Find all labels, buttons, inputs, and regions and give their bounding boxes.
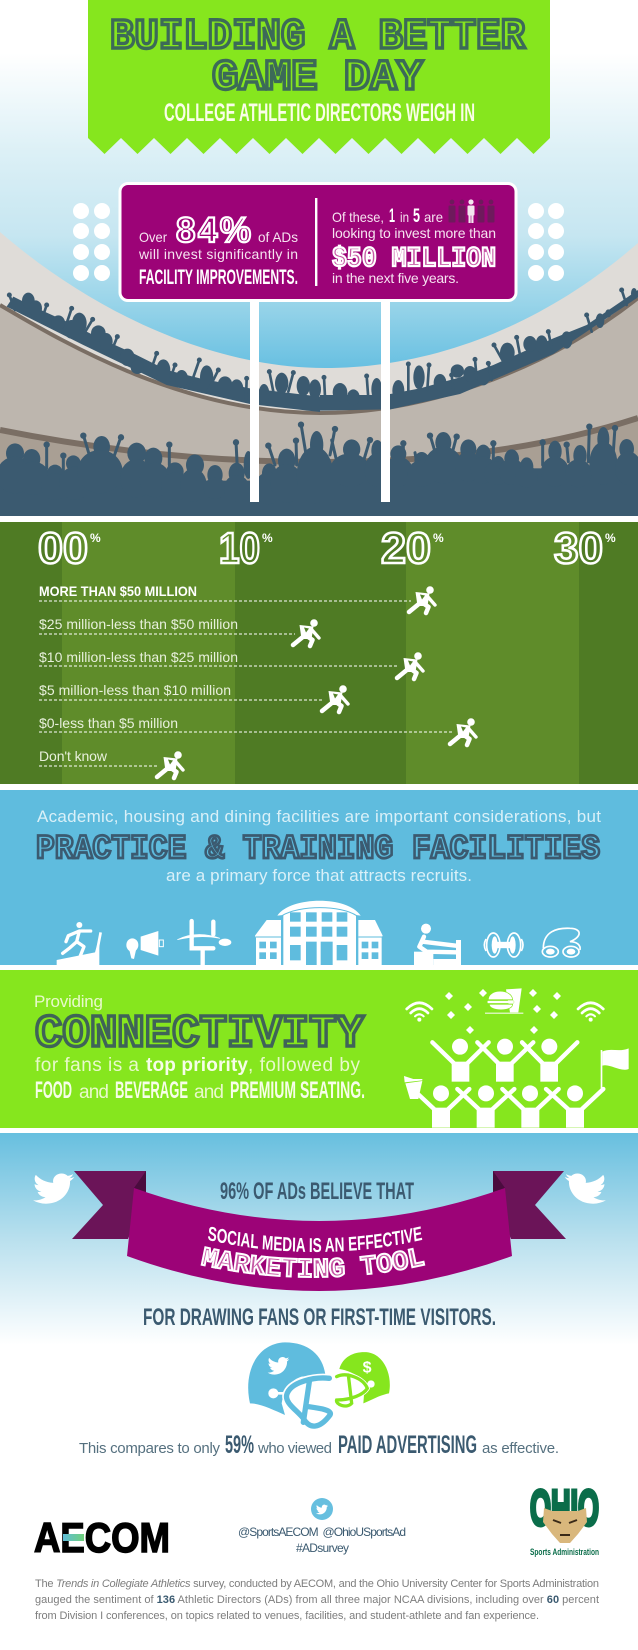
crowd: lower left: [0, 424, 333, 516]
ribbon folds: [134, 1171, 146, 1192]
stadium lights: right: [528, 203, 564, 281]
logo: AECOM: AECOM: [34, 1514, 170, 1561]
text: food, beverage, seating: FOOD: [35, 1077, 72, 1104]
row: $5 million-less than $10 million: $5 million-less than $10 million: [39, 682, 231, 698]
stat: 1 in 5: in: [400, 209, 409, 225]
icon: wifi right: [578, 1003, 603, 1022]
row: more than $50 million: MORE THAN $50 MILLION: [39, 583, 197, 599]
text: food, beverage, seating: BEVERAGE: [115, 1077, 188, 1104]
panel: title banner: [88, 0, 550, 154]
icon: upper row of fans: [432, 1039, 577, 1082]
icon: confetti diamonds: [445, 989, 561, 1034]
axis labels: 10: [219, 524, 260, 573]
intro text: Academic, housing and dining facilities are important considerations, but: [37, 807, 601, 826]
row: $10 million-less than $25 million: [39, 649, 423, 679]
stat: 1 in 5: 5: [413, 206, 420, 227]
text: 59 percent comparison: PAID ADVERTISING: [338, 1431, 477, 1459]
panel: stadium hero: [0, 0, 638, 516]
icon: burger and drink: [485, 988, 523, 1014]
stat: 1 in 5: are: [424, 209, 443, 225]
text: priority: [35, 1055, 360, 1076]
heading: PRACTICE & TRAINING FACILITIES: [36, 831, 600, 869]
sign board: [120, 184, 516, 300]
icon: twitter circle: [311, 1498, 333, 1520]
text: survey note: [35, 1578, 599, 1622]
icon: megaphone: [126, 931, 163, 959]
text: providing: Providing: [34, 992, 103, 1011]
title: GAME DAY: [212, 53, 423, 102]
axis labels: 20: [381, 524, 431, 573]
sky background: [0, 0, 638, 380]
row: $5 million-less than $10 million: [39, 682, 348, 712]
stat: 84 percent: Over: [139, 229, 167, 245]
panel: investment chart: %: [433, 531, 444, 545]
icon: wifi left: [407, 1003, 432, 1022]
icon: twitter bird right: [565, 1173, 606, 1204]
text: marketing tool: MARKETING TOOL: [200, 1246, 426, 1278]
stat: 1 in 5: [332, 206, 496, 286]
icon: five people: [448, 199, 494, 223]
logo: Ohio sports administration: OHIO: [530, 1481, 599, 1536]
icon: helmets: $: [363, 1359, 372, 1376]
stat: 84 percent: [138, 211, 298, 289]
upper rim: [0, 298, 638, 413]
text: 59 percent comparison: [79, 1431, 559, 1459]
banner shape: [88, 0, 550, 154]
stat: 1 in 5: $50 MILLION: [332, 244, 496, 275]
heading: CONNECTIVITY: [35, 1009, 364, 1060]
field stripes: [0, 522, 638, 784]
row: more than $50 million: [39, 583, 435, 613]
text: 96 percent: 96% OF ADs BELIEVE THAT: [220, 1178, 414, 1205]
text: 59 percent comparison: 59%: [225, 1431, 254, 1459]
panel: social media: [0, 1133, 638, 1459]
axis labels: [38, 524, 603, 573]
icon: cup: [404, 1076, 422, 1099]
row: don't know: Don't know: [39, 748, 108, 764]
crowd: upper right: [320, 288, 638, 411]
text: 59 percent comparison: This compares to only: [79, 1440, 220, 1457]
axis labels: 00: [38, 524, 88, 573]
icon: swim goggles: [542, 928, 580, 957]
icon: rowing machine: [414, 924, 461, 965]
stat: 1 in 5: Of these,: [332, 209, 384, 225]
section background: [0, 970, 638, 1128]
text: handles: #ADsurvey: [296, 1541, 349, 1555]
row: $10 million-less than $25 million: $10 million-less than $25 million: [39, 649, 238, 665]
text: food, beverage, seating: PREMIUM SEATING.: [230, 1077, 365, 1104]
panel: practice and training facilities: [0, 790, 638, 965]
panel: footer: [34, 1481, 600, 1622]
stadium lights: left: [73, 203, 110, 281]
lower rim: [0, 418, 638, 462]
panel: investment chart: %: [605, 531, 616, 545]
panel: scoreboard sign: [120, 184, 516, 300]
text: 59 percent comparison: who viewed: [257, 1440, 332, 1457]
panel: investment chart: %: [262, 531, 273, 545]
stat: 84 percent: of ADs: [258, 229, 298, 245]
text: survey note: from Division I conferences, on topics related to venues, facilities, and student-athlete and fan experience.: [35, 1610, 539, 1622]
section background: [0, 1133, 638, 1345]
row: don't know: [39, 748, 183, 778]
lower tier background: [0, 418, 638, 516]
title: [110, 12, 525, 102]
stat: 1 in 5: 1: [389, 206, 395, 227]
text: handles: @SportsAECOM @OhioUSportsAd: [238, 1525, 406, 1539]
logo: Ohio sports administration: [530, 1481, 600, 1557]
green helmet: [339, 1352, 390, 1403]
icon: goal post: [177, 921, 231, 965]
text: survey note: gauged the sentiment of 136 Athletic Directors (ADs) from all three major NCAA divisions, including over 60 percent: [35, 1594, 599, 1606]
text: 59 percent comparison: as effective.: [482, 1440, 559, 1457]
icon: dumbbell: [484, 933, 523, 957]
stadium upper stand: [0, 232, 638, 516]
row: $0-less than $5 million: [39, 715, 476, 745]
text: food, beverage, seating: and: [79, 1082, 109, 1103]
axis labels: 30: [554, 524, 603, 573]
text: survey note: The Trends in Collegiate Athletics survey, conducted by AECOM, and the Ohio University Center for Sports Administration: [35, 1578, 599, 1590]
row: $0-less than $5 million: $0-less than $5 million: [39, 715, 178, 731]
sign posts: [250, 300, 390, 502]
icon: helmets: [248, 1342, 390, 1426]
blue helmet: [248, 1342, 325, 1415]
panel: investment chart: %: [90, 531, 101, 545]
logo: Ohio sports administration: Sports Administration: [530, 1547, 599, 1557]
row: $25 million-less than $50 million: [39, 616, 319, 646]
row: $25 million-less than $50 million: $25 million-less than $50 million: [39, 616, 238, 632]
stat: 84 percent: will invest significantly in: [138, 246, 298, 262]
text: food, beverage, seating: [35, 1077, 365, 1104]
stat: 1 in 5: in the next five years.: [332, 270, 459, 286]
ribbon: [72, 1171, 566, 1291]
stat: 84 percent: FACILITY IMPROVEMENTS.: [139, 266, 298, 289]
text: priority: top priority: [146, 1055, 248, 1076]
crowd: upper left: [7, 293, 321, 412]
text: handles: [238, 1525, 406, 1555]
stadium wall: [0, 298, 638, 516]
ribbon tails: [72, 1171, 146, 1239]
title: BUILDING A BETTER: [110, 12, 525, 61]
icon: twitter bird left: [33, 1173, 74, 1204]
crowd: lower right: [320, 426, 638, 516]
section background: [0, 790, 638, 965]
panel: connectivity: [0, 970, 638, 1128]
text: priority: for fans is a: [35, 1055, 139, 1076]
icon: flag: [601, 1048, 629, 1088]
stat: 84 percent: 84%: [176, 211, 251, 250]
icon: treadmill: [57, 922, 101, 965]
ribbon body: [127, 1188, 512, 1291]
divider: [315, 198, 317, 286]
text: food, beverage, seating: and: [194, 1082, 224, 1103]
text: social media effective: SOCIAL MEDIA IS AN EFFECTIVE: [208, 1226, 422, 1252]
closing text: are a primary force that attracts recruits.: [166, 866, 472, 885]
panel: investment chart: [0, 522, 638, 784]
text: priority: , followed by: [248, 1055, 360, 1076]
stat: 1 in 5: looking to invest more than: [332, 225, 496, 241]
icon: lower row of fans: [418, 1085, 603, 1128]
icon: building: [255, 901, 383, 965]
